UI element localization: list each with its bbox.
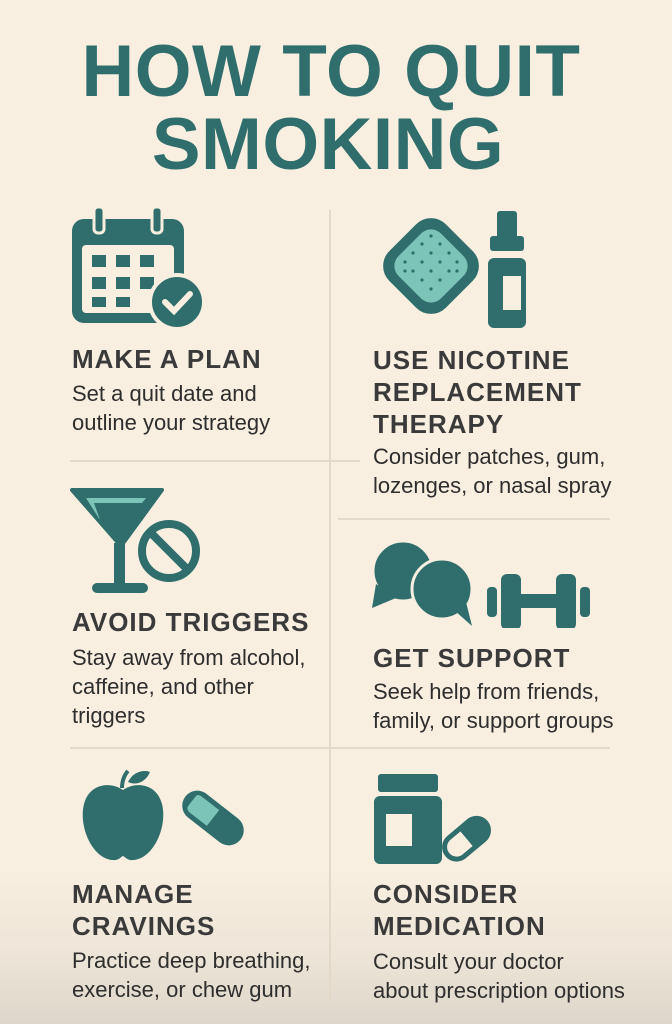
text xyxy=(72,381,270,435)
panel: get support xyxy=(372,542,613,733)
heading: CRAVINGS xyxy=(72,911,215,941)
heading: USE NICOTINE xyxy=(373,345,570,375)
heading: MAKE A PLAN xyxy=(72,344,262,374)
text: Set a quit date and xyxy=(72,381,257,406)
text: Consider patches, gum, xyxy=(373,444,605,469)
icon: patch and spray xyxy=(383,211,526,328)
panel: manage cravings xyxy=(72,770,310,1002)
title xyxy=(82,31,580,185)
icon: chat bubbles and dumbbell xyxy=(372,542,590,628)
icon: apple and capsule xyxy=(82,770,244,860)
text: family, or support groups xyxy=(373,708,613,733)
panel: make a plan xyxy=(72,208,270,435)
text: about prescription options xyxy=(373,978,625,1003)
text: Seek help from friends, xyxy=(373,679,599,704)
title: HOW TO QUIT xyxy=(82,31,580,112)
heading: CONSIDER xyxy=(373,879,518,909)
title: SMOKING xyxy=(152,104,504,185)
panel: consider medication xyxy=(373,774,625,1003)
text: Practice deep breathing, xyxy=(72,948,310,973)
icon: calendar xyxy=(72,208,202,327)
icon: glass with no sign xyxy=(70,488,200,593)
text: exercise, or chew gum xyxy=(72,977,292,1002)
heading: AVOID TRIGGERS xyxy=(72,607,309,637)
text xyxy=(373,444,612,498)
heading xyxy=(373,345,582,439)
heading xyxy=(72,879,215,941)
text xyxy=(373,679,613,733)
text xyxy=(72,645,306,728)
heading: GET SUPPORT xyxy=(373,643,570,673)
panel: nicotine replacement xyxy=(373,211,612,498)
text: caffeine, and other xyxy=(72,674,254,699)
text: Consult your doctor xyxy=(373,949,564,974)
panel: avoid triggers xyxy=(70,488,309,728)
text xyxy=(72,948,310,1002)
text: triggers xyxy=(72,703,145,728)
text xyxy=(373,949,625,1003)
text: Stay away from alcohol, xyxy=(72,645,306,670)
heading xyxy=(373,879,546,941)
heading: REPLACEMENT xyxy=(373,377,582,407)
heading: MANAGE xyxy=(72,879,194,909)
heading: MEDICATION xyxy=(373,911,546,941)
icon: pill bottle and capsule xyxy=(374,774,491,864)
heading: THERAPY xyxy=(373,409,504,439)
text: lozenges, or nasal spray xyxy=(373,473,611,498)
text: outline your strategy xyxy=(72,410,270,435)
